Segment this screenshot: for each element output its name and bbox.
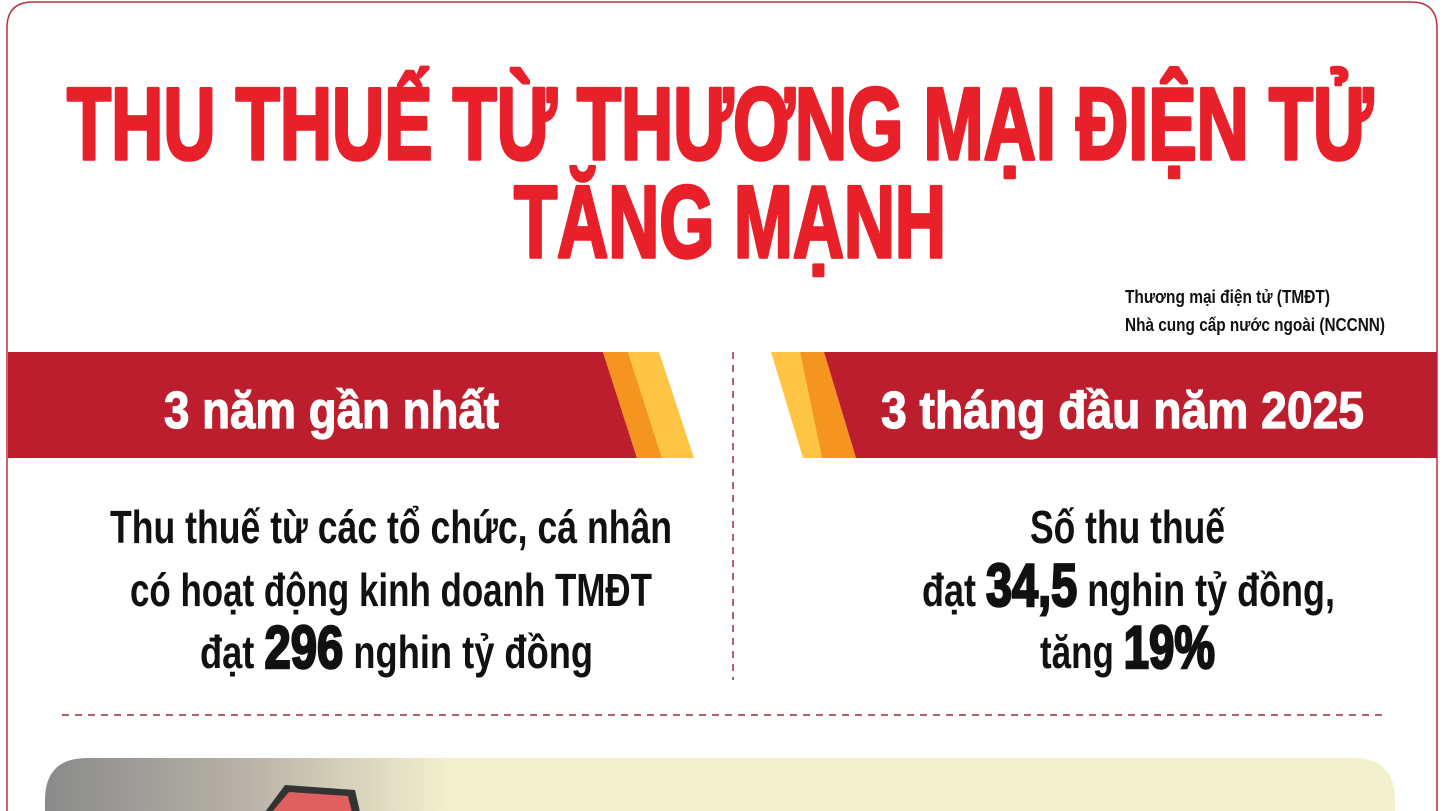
band: right header	[771, 352, 1437, 458]
legend notes: Nhà cung cấp nước ngoài (NCCNN)	[1125, 315, 1385, 335]
right text block	[922, 501, 1335, 681]
title	[67, 67, 1373, 279]
left text block: đạt 296 nghin tỷ đồng	[200, 614, 593, 681]
bottom panel with photo	[45, 758, 1395, 811]
legend notes	[1125, 287, 1385, 335]
left text block: có hoạt động kinh doanh TMĐT	[130, 564, 652, 616]
band: right header: 3 tháng đầu năm 2025	[881, 382, 1364, 440]
legend notes: Thương mại điện tử (TMĐT)	[1125, 287, 1330, 307]
band: left header	[8, 352, 694, 458]
left text block	[110, 501, 672, 681]
right text block: tăng 19%	[1040, 614, 1215, 681]
right text block: Số thu thuế	[1030, 501, 1225, 553]
right text block: đạt 34,5 nghin tỷ đồng,	[922, 552, 1335, 619]
band: left header: 3 năm gần nhất	[164, 382, 499, 440]
title: TĂNG MẠNH	[514, 165, 946, 279]
left text block: Thu thuế từ các tổ chức, cá nhân	[110, 501, 672, 553]
